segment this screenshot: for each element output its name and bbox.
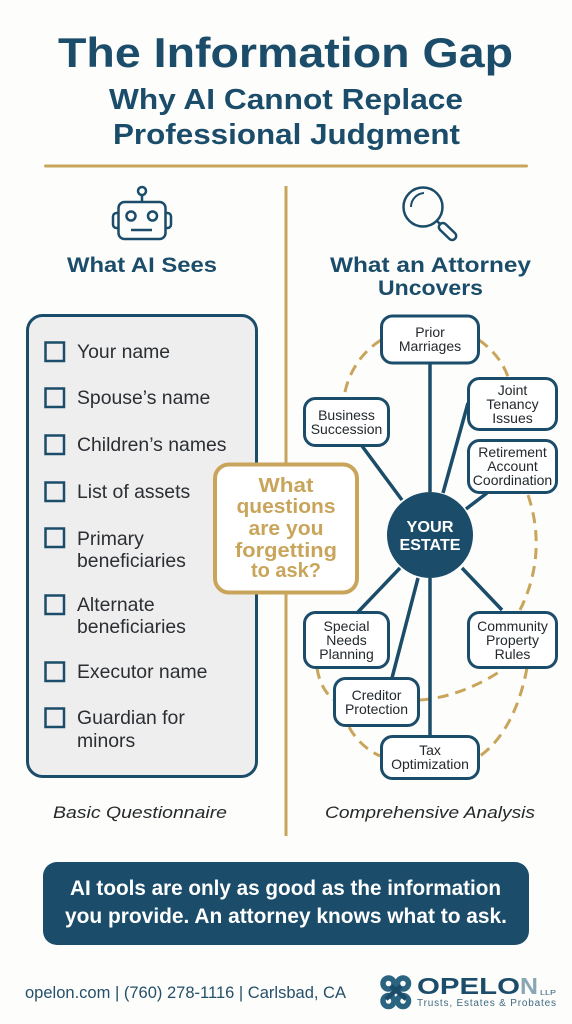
banner: key takeaway: AI tools are only as good as the information xyxy=(70,877,501,900)
node: special needs planning: Special xyxy=(324,618,369,634)
logo: Opelon LLP: Trusts, Estates & Probates xyxy=(417,998,556,1009)
checklist item: alternate beneficiaries: Alternate xyxy=(77,594,155,616)
node: joint tenancy issues: Joint xyxy=(498,382,527,398)
callout: what questions are you forgetting to ask xyxy=(215,464,357,592)
node: special needs planning xyxy=(304,612,388,668)
checklist item: guardian for minors: minors xyxy=(77,730,135,752)
logo: Opelon LLP: OPELO xyxy=(417,973,520,999)
checklist item: primary beneficiaries: beneficiaries xyxy=(77,550,186,572)
heading: what AI sees: What AI Sees xyxy=(67,254,217,277)
callout: what questions are you forgetting to ask: are you xyxy=(248,518,324,540)
checklist item: children's names: Children’s names xyxy=(77,434,226,456)
node: your estate xyxy=(387,492,473,578)
node: retirement account coordination: Account xyxy=(487,458,538,474)
heading: what an attorney uncovers xyxy=(330,254,531,300)
checklist item: alternate beneficiaries xyxy=(46,594,186,638)
heading: what an attorney uncovers: What an Attorney xyxy=(330,254,531,277)
node: community property rules: Community xyxy=(477,618,548,634)
caption: comprehensive analysis: Comprehensive Analysis xyxy=(325,803,536,822)
checklist item: your name: Your name xyxy=(77,341,170,363)
contact line: opelon.com | (760) 278-1116 | Carlsbad, CA xyxy=(25,983,347,1002)
panel: questionnaire checklist xyxy=(28,316,256,776)
checklist item: list of assets: List of assets xyxy=(77,481,190,503)
node: tax optimization: Tax xyxy=(419,742,441,758)
node: your estate: YOUR xyxy=(406,519,454,536)
node: community property rules: Property xyxy=(486,632,539,648)
subtitle: Professional Judgment xyxy=(113,119,460,151)
subtitle xyxy=(109,84,463,151)
node: community property rules xyxy=(468,612,556,668)
node: business succession: Succession xyxy=(311,421,382,437)
callout: what questions are you forgetting to ask: questions xyxy=(236,496,336,518)
checklist item: guardian for minors xyxy=(46,707,185,752)
node: retirement account coordination: Coordination xyxy=(473,472,552,488)
node: retirement account coordination: Retirement xyxy=(478,444,547,460)
caption: basic questionnaire: Basic Questionnaire xyxy=(53,803,227,822)
node: joint tenancy issues: Tenancy xyxy=(486,396,539,412)
node: tax optimization xyxy=(382,736,478,778)
node: joint tenancy issues xyxy=(468,378,556,430)
node: tax optimization: Optimization xyxy=(391,756,469,772)
checklist item: primary beneficiaries: Primary xyxy=(77,528,144,550)
node: retirement account coordination xyxy=(468,440,556,492)
logo: Opelon LLP xyxy=(383,973,556,1009)
node: your estate: ESTATE xyxy=(400,537,461,554)
subtitle: Why AI Cannot Replace xyxy=(109,84,463,116)
node: prior marriages: Prior xyxy=(415,324,445,340)
icon: magnifying glass xyxy=(404,188,458,242)
node: joint tenancy issues: Issues xyxy=(492,410,533,426)
checklist item: executor name: Executor name xyxy=(77,661,207,683)
callout: what questions are you forgetting to ask: What xyxy=(258,475,314,497)
callout: what questions are you forgetting to ask: to ask? xyxy=(251,560,321,582)
node: prior marriages: Marriages xyxy=(399,338,461,354)
checklist item: guardian for minors: Guardian for xyxy=(77,707,185,729)
node: creditor protection: Creditor xyxy=(352,687,402,703)
logo: Opelon LLP: N xyxy=(520,973,538,999)
node: creditor protection: Protection xyxy=(345,701,408,717)
node: community property rules: Rules xyxy=(495,646,530,662)
banner: key takeaway: you provide. An attorney knows what to ask. xyxy=(65,905,507,928)
node: business succession xyxy=(304,398,388,446)
node: business succession: Business xyxy=(318,407,375,423)
checklist item: spouse's name: Spouse’s name xyxy=(77,387,210,409)
node: special needs planning: Needs xyxy=(326,632,367,648)
callout: what questions are you forgetting to ask: forgetting xyxy=(235,540,337,562)
checklist item: primary beneficiaries xyxy=(46,528,186,572)
heading: what an attorney uncovers: Uncovers xyxy=(378,277,483,300)
logo: Opelon LLP: LLP xyxy=(540,990,556,997)
checklist item: alternate beneficiaries: beneficiaries xyxy=(77,616,186,638)
node: creditor protection xyxy=(334,678,418,726)
icon: robot xyxy=(113,187,171,239)
node: special needs planning: Planning xyxy=(319,646,374,662)
icon: knot mark xyxy=(383,978,408,1006)
node: prior marriages xyxy=(382,316,478,363)
banner: key takeaway xyxy=(43,862,529,945)
title: The Information Gap xyxy=(58,29,513,76)
diagram: estate issue map xyxy=(304,316,556,778)
